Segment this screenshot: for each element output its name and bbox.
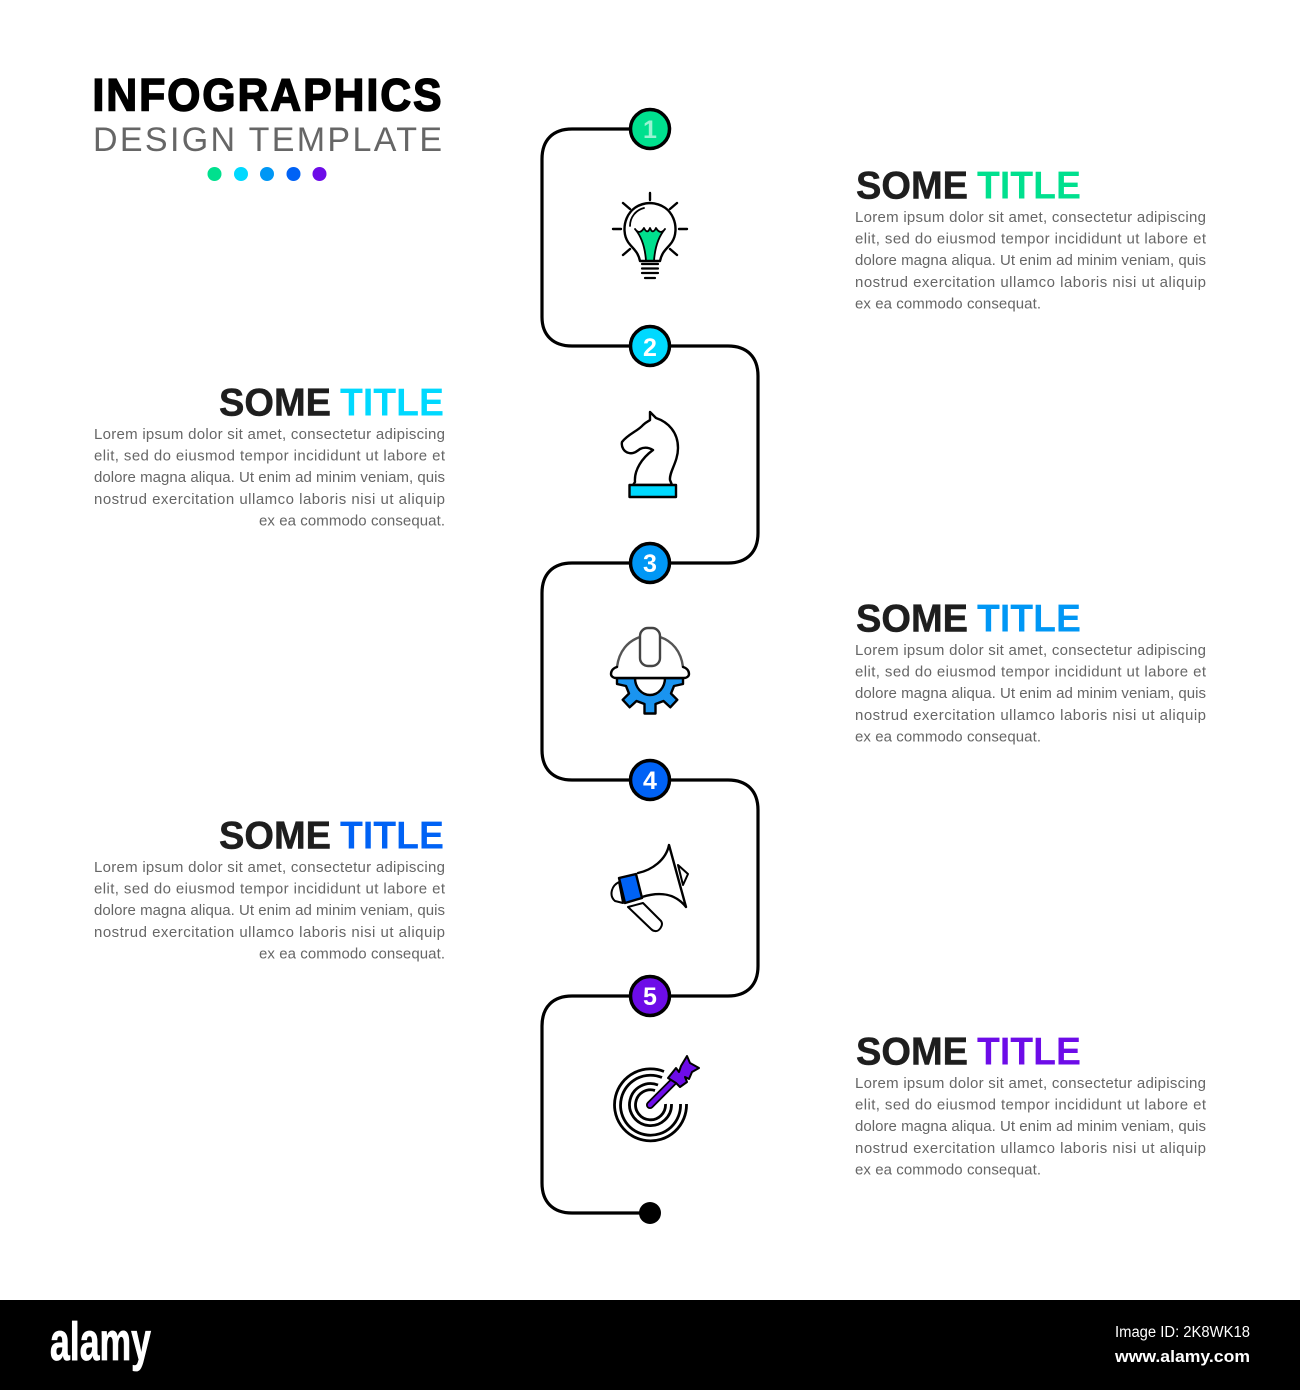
panel: step 5 text — [855, 1030, 1207, 1178]
heading — [856, 598, 1081, 640]
heading: TITLE — [977, 598, 1081, 640]
heading: SOME — [219, 382, 331, 424]
step marker 2 — [630, 326, 670, 366]
icon: target with arrow — [615, 1056, 699, 1141]
subtitle: DESIGN TEMPLATE — [93, 121, 442, 159]
website: www.alamy.com — [1114, 1347, 1250, 1366]
step marker 5 — [630, 976, 670, 1016]
panel: step 3 text — [855, 598, 1207, 746]
body text: Lorem ipsum dolor sit amet, consectetur adipiscing — [855, 642, 1206, 659]
body text: elit, sed do eiusmod tempor incididunt ut labore et — [94, 448, 446, 464]
body text: elit, sed do eiusmod tempor incididunt ut labore et — [855, 664, 1207, 680]
icon: light bulb — [613, 193, 687, 278]
heading: TITLE — [340, 814, 444, 858]
body text: nostrud exercitation ullamco laboris nisi ut aliquip — [855, 274, 1206, 291]
title: INFOGRAPHICS — [92, 70, 442, 121]
body text: ex ea commodo consequat. — [259, 946, 445, 962]
icon: chess knight — [622, 412, 678, 497]
heading: SOME — [856, 164, 968, 208]
body text: nostrud exercitation ullamco laboris nisi ut aliquip — [94, 924, 445, 941]
heading: SOME — [856, 598, 968, 640]
panel: step 4 text — [94, 814, 446, 962]
alamy logo text: alamy — [50, 1312, 151, 1372]
heading: SOME — [219, 814, 331, 858]
heading: SOME — [856, 1030, 968, 1074]
body text: Lorem ipsum dolor sit amet, consectetur adipiscing — [94, 859, 445, 876]
heading — [219, 382, 444, 424]
footer bar: alamy watermark — [0, 1300, 1300, 1390]
body text: dolore magna aliqua. Ut enim ad minim veniam, quis — [855, 1118, 1206, 1135]
body text: nostrud exercitation ullamco laboris nisi ut aliquip — [855, 1140, 1206, 1157]
body text: Lorem ipsum dolor sit amet, consectetur adipiscing — [855, 1075, 1206, 1092]
heading: TITLE — [977, 164, 1081, 208]
step marker 3: 3 — [643, 550, 657, 578]
step marker 4: 4 — [643, 767, 657, 795]
body text: ex ea commodo consequat. — [259, 512, 445, 530]
step marker 3 — [630, 544, 670, 582]
icon: megaphone — [612, 845, 688, 931]
panel: step 2 text — [94, 382, 446, 530]
step marker 2: 2 — [643, 334, 657, 362]
heading — [856, 1030, 1081, 1074]
body text: nostrud exercitation ullamco laboris nisi ut aliquip — [855, 707, 1206, 724]
step marker 1: 1 — [643, 116, 657, 144]
body text — [94, 426, 446, 530]
body text: Lorem ipsum dolor sit amet, consectetur adipiscing — [855, 209, 1206, 226]
icon: helmet with gear — [611, 628, 689, 714]
step marker 4 — [630, 760, 670, 800]
body text: dolore magna aliqua. Ut enim ad minim veniam, quis — [855, 685, 1206, 702]
panel: step 1 text — [855, 164, 1207, 312]
timeline end dot — [639, 1202, 661, 1224]
colour dots legend — [208, 167, 326, 181]
body text: ex ea commodo consequat. — [855, 728, 1041, 746]
heading: TITLE — [340, 382, 444, 424]
body text: dolore magna aliqua. Ut enim ad minim veniam, quis — [94, 469, 445, 486]
body text: elit, sed do eiusmod tempor incididunt ut labore et — [94, 880, 446, 898]
heading — [219, 814, 444, 858]
body text — [94, 859, 446, 962]
body text — [855, 1075, 1207, 1178]
body text: dolore magna aliqua. Ut enim ad minim veniam, quis — [94, 902, 445, 919]
image id: Image ID: 2K8WK18 — [1115, 1324, 1250, 1341]
body text — [855, 209, 1207, 312]
heading: TITLE — [977, 1030, 1081, 1074]
body text: dolore magna aliqua. Ut enim ad minim veniam, quis — [855, 252, 1206, 269]
body text: elit, sed do eiusmod tempor incididunt ut labore et — [855, 1096, 1207, 1114]
body text — [855, 642, 1207, 746]
body text: elit, sed do eiusmod tempor incididunt ut labore et — [855, 230, 1207, 248]
header: infographics design template — [92, 70, 442, 181]
heading — [856, 164, 1081, 208]
step marker 5: 5 — [643, 983, 657, 1011]
body text: ex ea commodo consequat. — [855, 296, 1041, 312]
body text: nostrud exercitation ullamco laboris nisi ut aliquip — [94, 491, 445, 508]
body text: ex ea commodo consequat. — [855, 1162, 1041, 1178]
serpentine timeline line — [542, 129, 758, 1213]
step marker 1 — [630, 110, 670, 148]
body text: Lorem ipsum dolor sit amet, consectetur adipiscing — [94, 426, 445, 443]
